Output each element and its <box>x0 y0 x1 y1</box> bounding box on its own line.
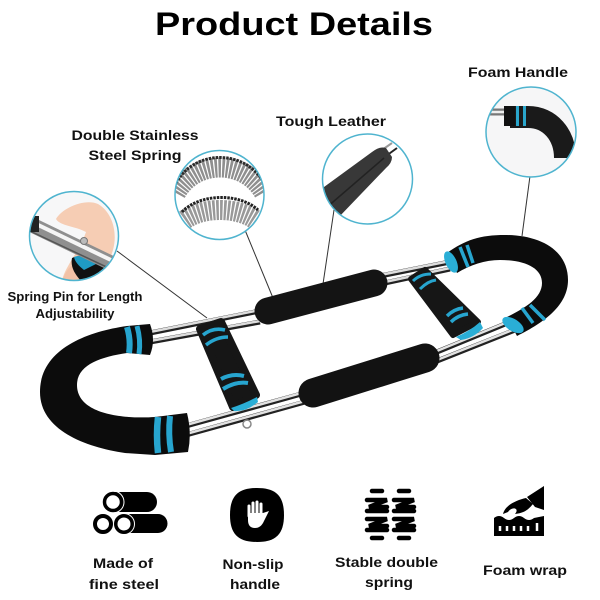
caption: made of fine steel: Made of <box>93 555 153 571</box>
label: double stainless steel spring: Double Stainless <box>72 127 199 143</box>
top leather grip <box>268 283 374 311</box>
leader lines <box>117 176 530 318</box>
caption: stable double spring <box>335 554 438 590</box>
callout: springs closeup <box>175 150 264 240</box>
caption: non-slip handle <box>222 556 284 592</box>
label: spring pin: Adjustability <box>36 307 115 321</box>
right cross grip <box>411 270 483 340</box>
callout: tough leather closeup <box>320 134 412 224</box>
product: arm exerciser <box>40 235 568 455</box>
icon: foam wrap <box>494 486 544 536</box>
label: double stainless steel spring: Steel Spring <box>88 147 182 163</box>
caption: non-slip handle: handle <box>230 576 280 592</box>
callout: foam handle closeup <box>485 87 576 177</box>
label: tough leather: Tough Leather <box>276 113 387 129</box>
label: spring pin: Spring Pin for Length <box>8 290 142 304</box>
right U foam grip <box>441 235 568 336</box>
caption: stable double spring: spring <box>365 574 413 590</box>
icon: double spring <box>367 491 414 538</box>
left cross grip <box>200 322 258 411</box>
title: Product Details <box>155 6 433 42</box>
callout: spring pin closeup <box>30 192 118 284</box>
label: foam handle: Foam Handle <box>468 64 568 80</box>
icon: steel pipes <box>95 491 168 534</box>
label: spring pin <box>8 290 142 321</box>
icon: non-slip hand <box>230 488 284 542</box>
caption: made of fine steel: fine steel <box>89 576 159 592</box>
bottom leather grip <box>313 358 425 393</box>
caption: made of fine steel <box>89 555 159 592</box>
left U foam grip <box>40 324 190 455</box>
caption: non-slip handle: Non-slip <box>222 556 284 572</box>
steel rods <box>150 261 515 435</box>
caption: stable double spring: Stable double <box>335 554 438 570</box>
caption: foam wrap: Foam wrap <box>483 562 567 578</box>
label: double stainless steel spring <box>72 127 199 163</box>
